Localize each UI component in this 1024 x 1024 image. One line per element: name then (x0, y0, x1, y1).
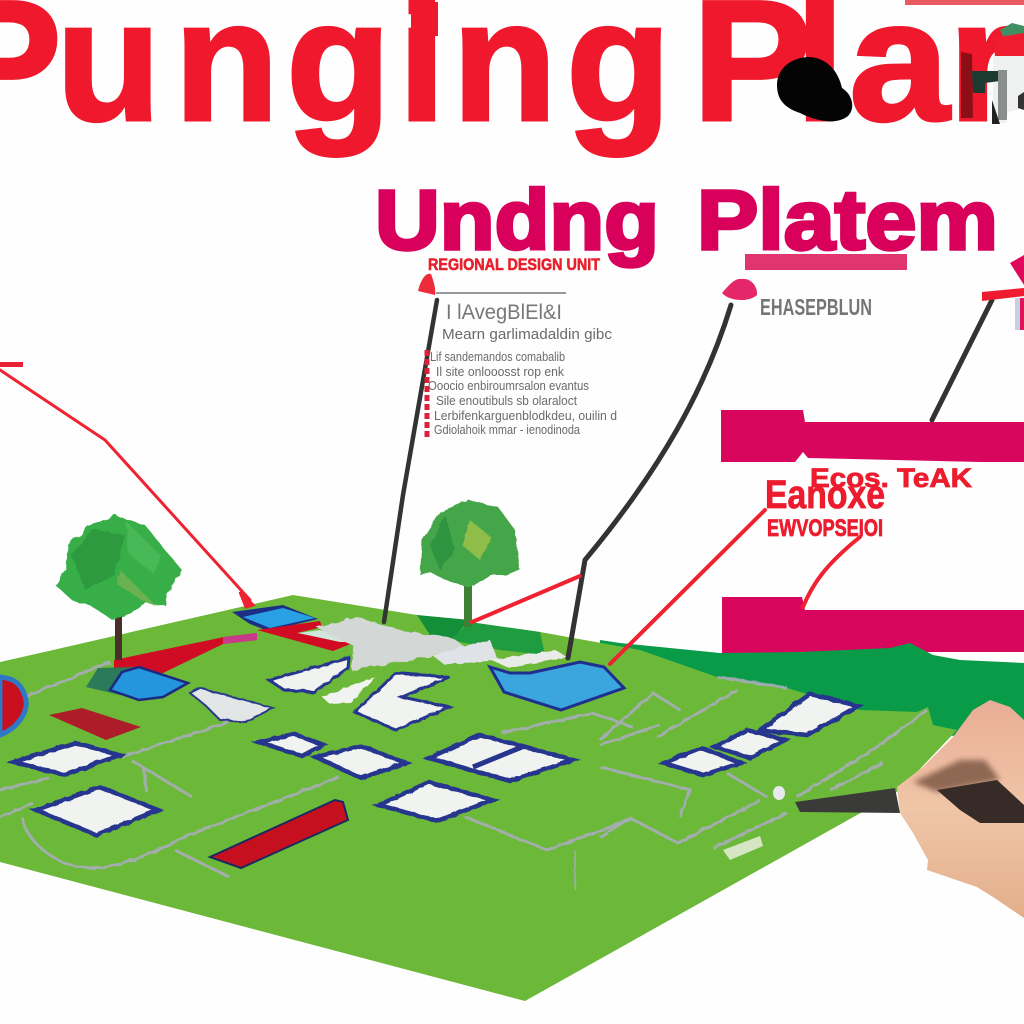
hand (897, 700, 1024, 918)
callout text block: centre: Mearn garlimadaldin gibc (442, 326, 612, 343)
red plot: bottom (210, 800, 348, 868)
callout text block: centre: I lAvegBlEl&I (446, 301, 562, 324)
pen (795, 788, 900, 813)
black pointer lines (384, 300, 992, 658)
darker lawn patches (417, 615, 470, 638)
red plot: left (49, 708, 141, 740)
red caption: REGIONAL DESIGN UNIT (428, 255, 601, 274)
site paths (0, 662, 927, 890)
red callout labels: EWVOPSEIOI (767, 515, 883, 542)
callout text block: centre: Il site onlooosst rop enk (436, 365, 565, 379)
central white buildings (190, 640, 567, 730)
red marker strip along pointer (424, 350, 430, 440)
dark grip (937, 780, 1024, 823)
pink end of long strip (223, 633, 257, 644)
black blot on title (777, 57, 852, 121)
tree: left (55, 515, 182, 660)
tree: centre (420, 500, 520, 627)
red pointer lines (0, 370, 860, 664)
main title (0, 0, 1018, 157)
callout text block: centre: Ooocio enbiroumrsalon evantus (428, 379, 589, 393)
callout label: right grey: EHASEPBLUN (760, 294, 872, 320)
red arrowhead (240, 592, 253, 607)
white speckle note (723, 836, 763, 860)
ground: dark green back strip (600, 640, 1024, 740)
shadow between fingers (913, 760, 1000, 792)
pool: left (86, 667, 188, 700)
plot divider (473, 747, 522, 767)
top right photo fragment (905, 0, 1024, 124)
red callout labels: Ecos. TeAK (810, 463, 973, 493)
pond: blue (490, 662, 624, 710)
pool: top (232, 605, 318, 631)
callout text block: centre (428, 293, 617, 437)
subtitle: Undng (375, 173, 659, 267)
pointer markers (0, 255, 1024, 367)
callout text block: centre: Sile enoutibuls sb olaraloct (436, 394, 577, 408)
red callout labels (765, 463, 973, 542)
subtitle underline bar (745, 254, 907, 270)
hand holding pen (795, 700, 1024, 918)
pond: far left red (0, 677, 26, 735)
callout text block: centre: Lerbifenkarguenblodkdeu, ouilin d (434, 409, 617, 423)
subtitle (375, 173, 998, 267)
magenta band: lower (722, 597, 1024, 655)
red strip: long (114, 633, 257, 673)
white blob (773, 786, 785, 800)
magenta band: upper (721, 410, 1024, 462)
red strip: top (257, 621, 353, 651)
pale strip (298, 630, 360, 642)
callout text block: centre: Lif sandemandos comabalib (430, 350, 565, 364)
red callout labels: Eanoxe (765, 473, 885, 517)
callout text block: centre: Gdiolahoik mmar - ienodinoda (434, 423, 580, 437)
ground plan: lawn (0, 595, 957, 1001)
white plots with blue borders (14, 694, 858, 835)
subtitle: Platem (697, 173, 998, 267)
grey building mass (317, 617, 470, 670)
